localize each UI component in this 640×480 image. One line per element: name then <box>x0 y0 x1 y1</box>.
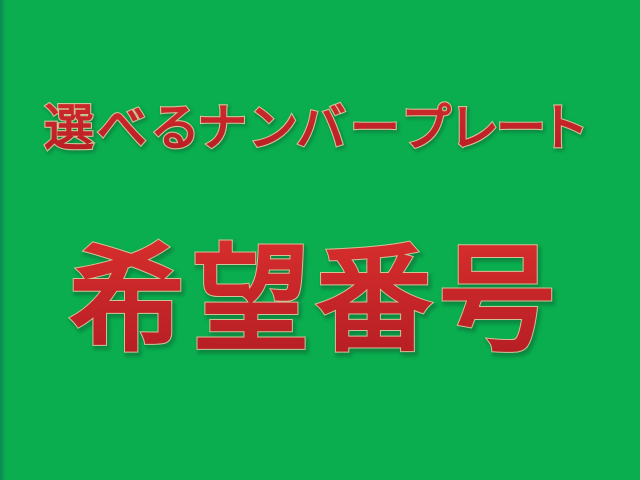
title: desired number: 希望番号 <box>71 238 557 368</box>
title: desired number: 希望番号 <box>69 235 555 365</box>
title: desired number: 希望番号 <box>69 235 555 365</box>
subtitle: selectable number plate: 選べるナンバープレート <box>46 102 590 158</box>
subtitle: selectable number plate: 選べるナンバープレート <box>44 100 589 156</box>
subtitle: selectable number plate: 選べるナンバープレート <box>44 100 589 156</box>
